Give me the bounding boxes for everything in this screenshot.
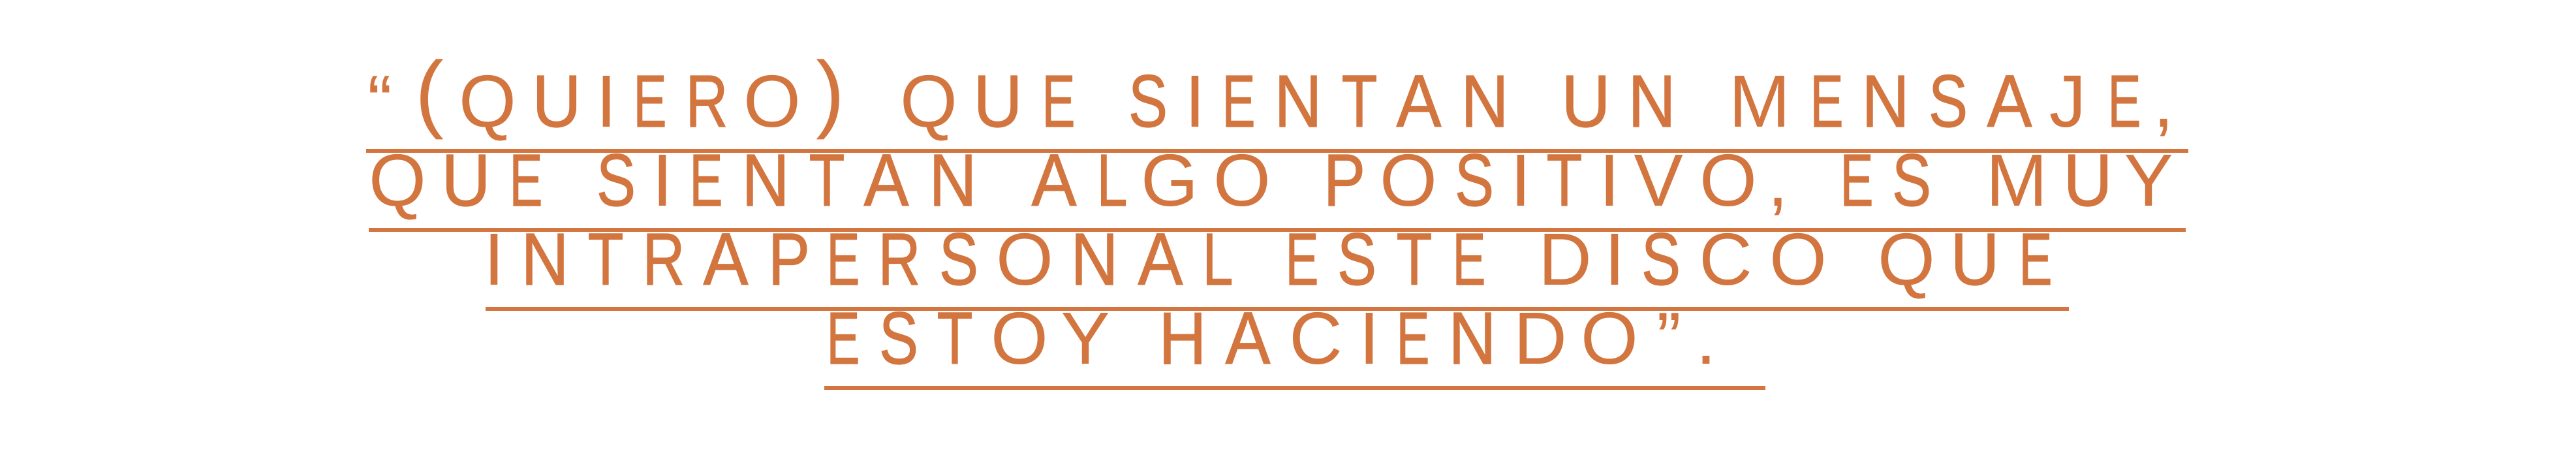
quote line 3 with underline: INTRAPERSONAL ESTE DISCO QUE	[484, 218, 2052, 300]
quote line 1 with underline: “ (QUIERO) QUE SIENTAN UN M ENSAJ E,	[367, 44, 2174, 142]
quote line 2 with underline: QUE SIENTAN ALGO POSITIVO, ES MUY	[369, 139, 2173, 221]
quote line 4 with underline: ESTOY HACIENDO”.	[826, 297, 1716, 379]
quote block	[366, 44, 2188, 390]
